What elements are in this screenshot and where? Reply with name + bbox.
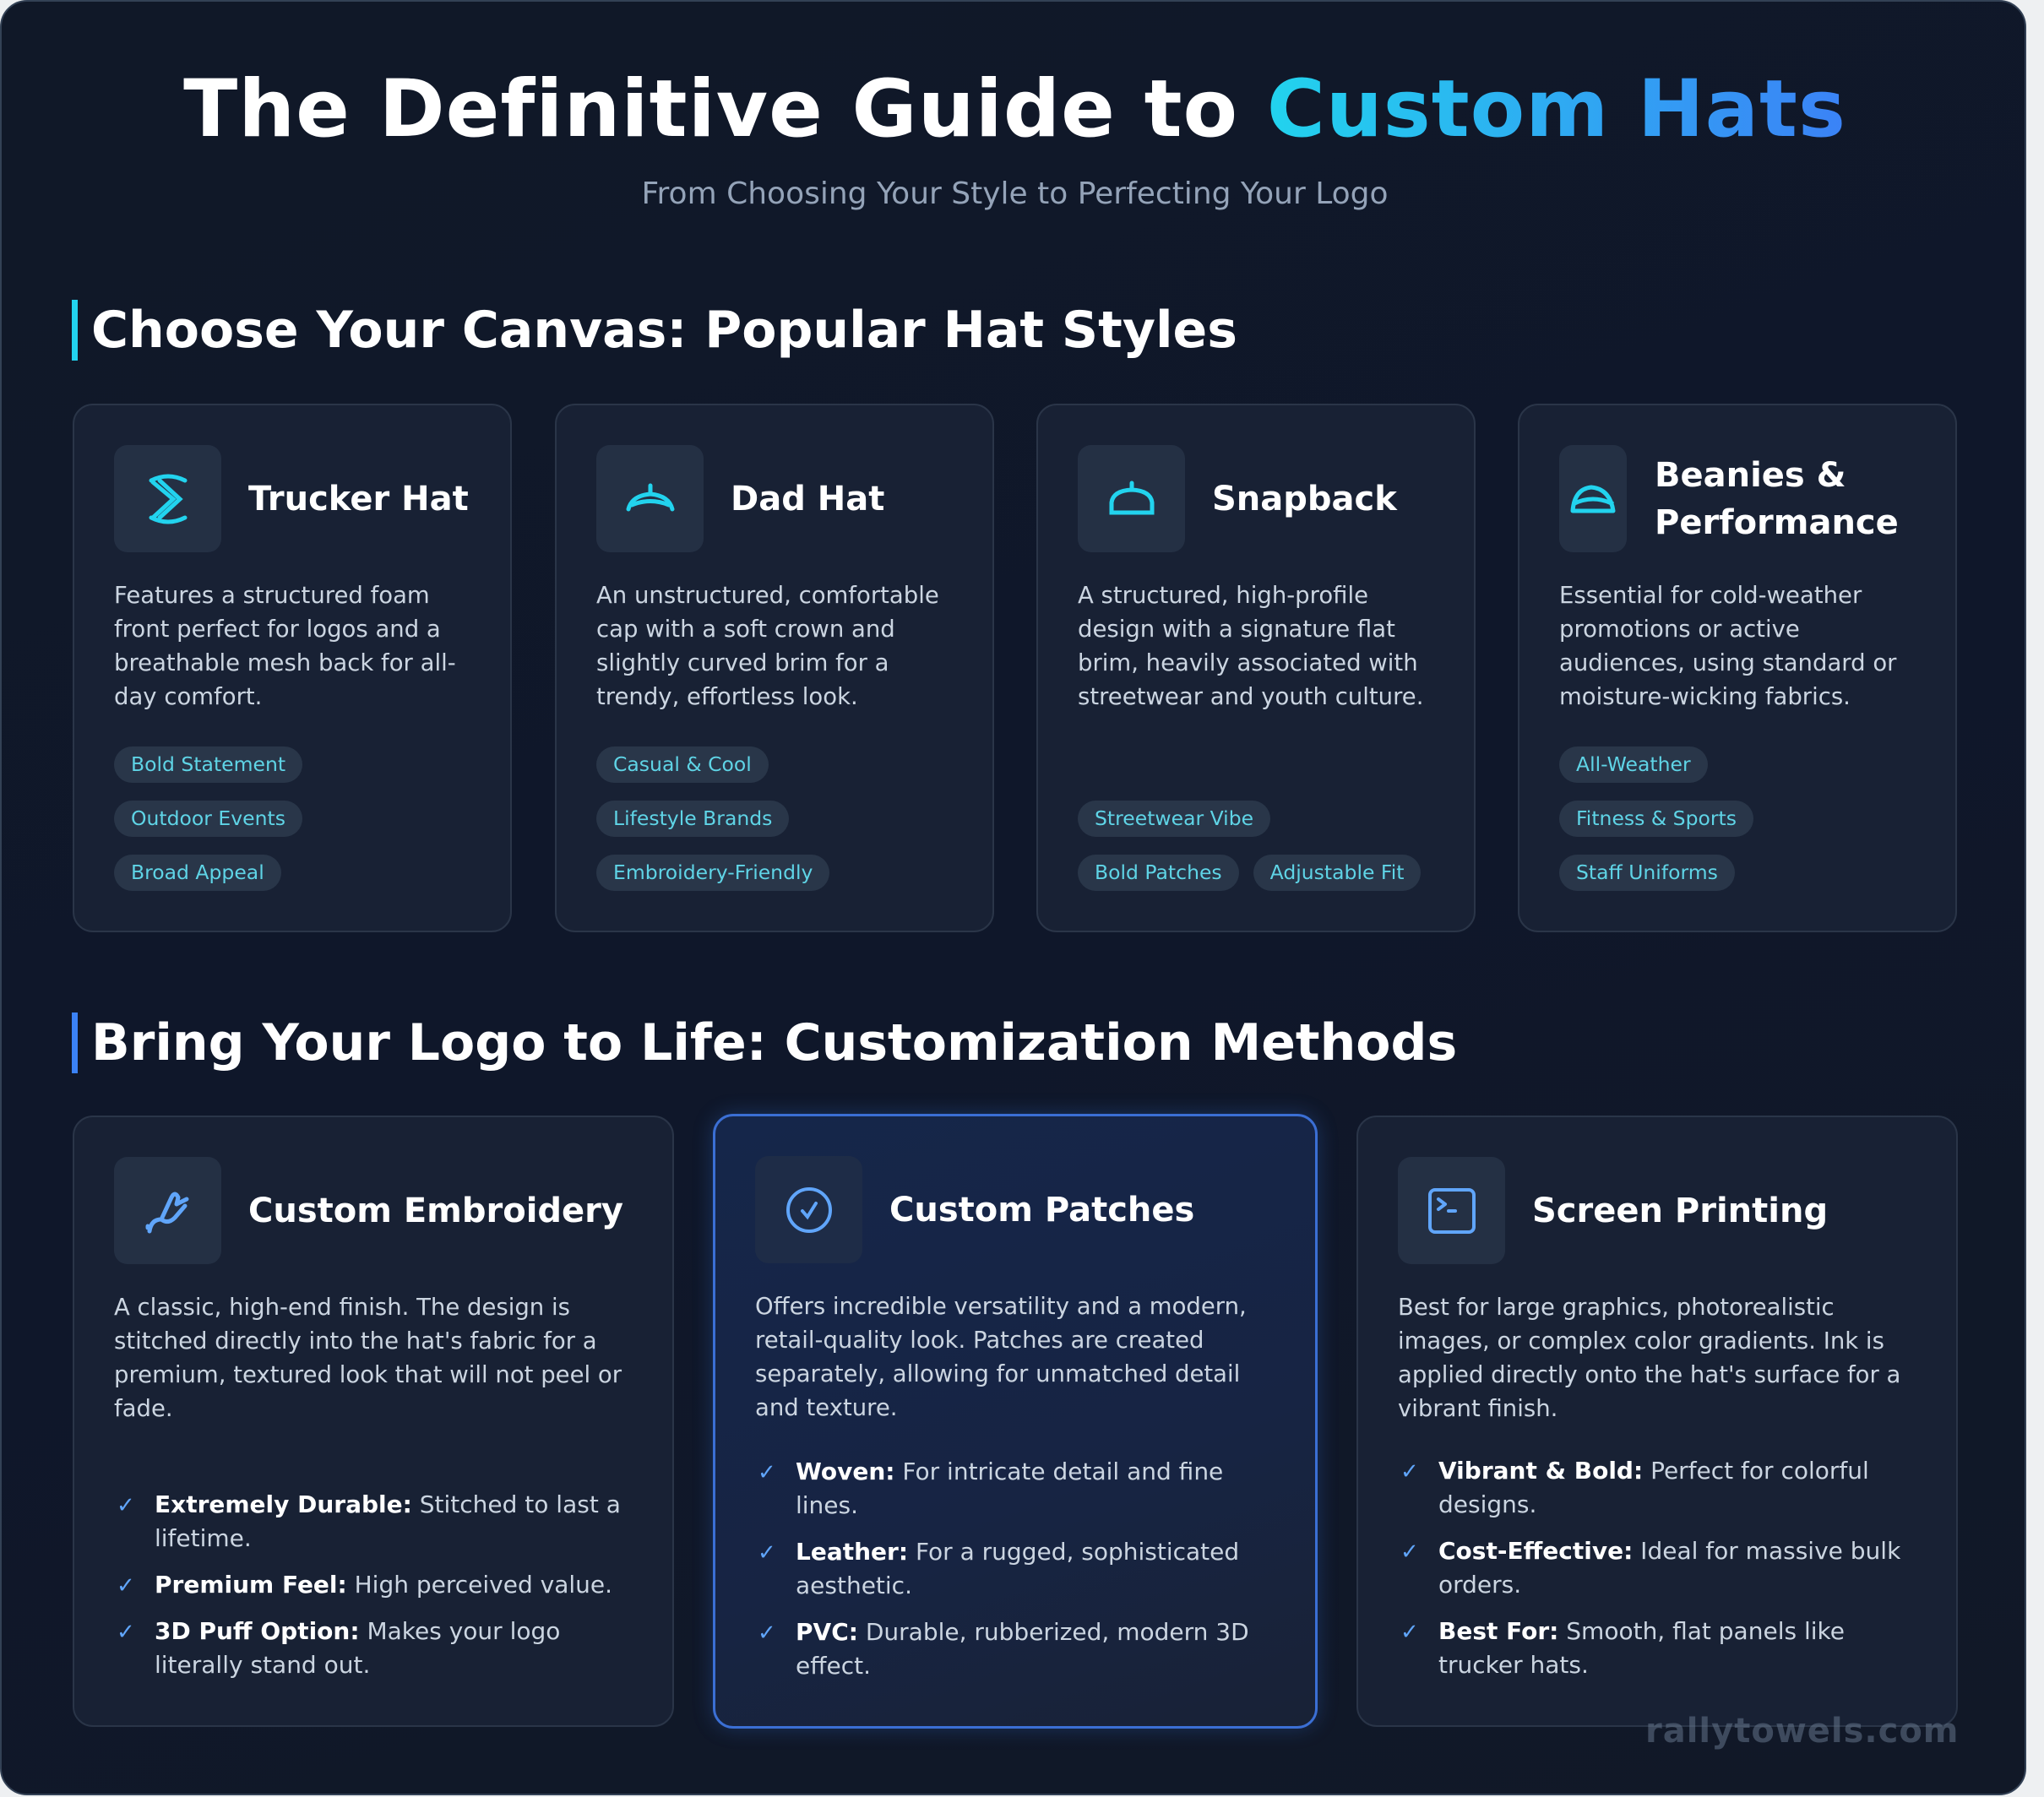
feature list: Best For: Smooth, flat panels like trucker hats. bbox=[1438, 1617, 1845, 1679]
tags: Adjustable Fit bbox=[1270, 860, 1404, 884]
feature list: Cost-Effective: Ideal for massive bulk orders. bbox=[1438, 1537, 1900, 1599]
header: beanies bbox=[1559, 445, 1899, 552]
icon: needle bbox=[114, 1157, 221, 1264]
header: trucker hat bbox=[114, 445, 469, 552]
title: The Definitive Guide to Custom Hats bbox=[183, 63, 1846, 155]
feature list bbox=[120, 1490, 621, 1679]
header: dad hat bbox=[596, 445, 884, 552]
tags: Casual & Cool bbox=[613, 752, 752, 776]
header: embroidery: Custom Embroidery bbox=[248, 1191, 623, 1230]
tags: Bold Patches bbox=[1095, 860, 1222, 884]
tags: Broad Appeal bbox=[131, 860, 264, 884]
tags bbox=[1559, 746, 1753, 891]
tags: Outdoor Events bbox=[131, 806, 285, 830]
header: snapback bbox=[1078, 445, 1398, 552]
icon: terminal bbox=[1398, 1157, 1505, 1264]
header: embroidery bbox=[114, 1157, 623, 1264]
feature list: PVC: Durable, rubberized, modern 3D effect. bbox=[796, 1618, 1249, 1680]
tags bbox=[1078, 801, 1421, 891]
tags: All-Weather bbox=[1576, 752, 1691, 776]
header: trucker hat: Trucker Hat bbox=[248, 480, 469, 518]
section heading: customization methods: Bring Your Logo to Life: Customization Methods bbox=[91, 1013, 1457, 1072]
tags: Streetwear Vibe bbox=[1095, 806, 1253, 830]
icon: snapback bbox=[1078, 445, 1185, 552]
description: An unstructured, comfortable cap with a soft crown and slightly curved brim for a trendy, effortless look. bbox=[596, 582, 939, 710]
panel: screen printing bbox=[1356, 1116, 1958, 1727]
tags: Lifestyle Brands bbox=[613, 806, 772, 830]
header: beanies: Performance bbox=[1655, 503, 1899, 542]
icon: dad hat bbox=[596, 445, 704, 552]
header: beanies: Beanies & bbox=[1655, 456, 1846, 495]
feature list: Vibrant & Bold: Perfect for colorful designs. bbox=[1438, 1457, 1869, 1518]
tags bbox=[114, 746, 302, 891]
description: A classic, high-end finish. The design is stitched directly into the hat's fabric for a premium, textured look that will not peel or fade. bbox=[114, 1294, 622, 1422]
feature list: Extremely Durable: Stitched to last a lifetime. bbox=[155, 1490, 621, 1552]
feature list: 3D Puff Option: Makes your logo literally stand out. bbox=[155, 1617, 560, 1679]
tags: Embroidery-Friendly bbox=[613, 860, 813, 884]
icon: beanie bbox=[1559, 445, 1627, 552]
panel: snapback bbox=[1036, 404, 1476, 932]
watermark: rallytowels.com bbox=[1645, 1712, 1959, 1751]
panel: custom patches (highlighted) bbox=[713, 1114, 1318, 1729]
description: Offers incredible versatility and a modern, retail-quality look. Patches are created separately, allowing for unmatched detail and texture. bbox=[755, 1293, 1247, 1421]
panel: trucker hat bbox=[73, 404, 512, 932]
header: patches: Custom Patches bbox=[889, 1191, 1194, 1230]
tags: Fitness & Sports bbox=[1576, 806, 1737, 830]
description: Features a structured foam front perfect for logos and a breathable mesh back for all-day comfort. bbox=[114, 582, 456, 710]
feature list: Premium Feel: High perceived value. bbox=[155, 1571, 612, 1599]
feature list bbox=[760, 1458, 1249, 1680]
header: patches bbox=[755, 1156, 1194, 1263]
panel: dad hat bbox=[555, 404, 994, 932]
header: dad hat: Dad Hat bbox=[731, 480, 884, 518]
feature list: Woven: For intricate detail and fine lines. bbox=[796, 1458, 1223, 1519]
description: Best for large graphics, photorealistic images, or complex color gradients. Ink is applied directly onto the hat's surface for a vibrant finish. bbox=[1398, 1294, 1900, 1422]
description: A structured, high-profile design with a signature flat brim, heavily associated with streetwear and youth culture. bbox=[1078, 582, 1423, 710]
tags: Bold Statement bbox=[131, 752, 285, 776]
panel: custom embroidery bbox=[73, 1116, 674, 1727]
feature list: Leather: For a rugged, sophisticated aesthetic. bbox=[796, 1538, 1239, 1599]
panel: beanies bbox=[1518, 404, 1957, 932]
section heading: hat styles: Choose Your Canvas: Popular Hat Styles bbox=[91, 301, 1237, 360]
tags: Staff Uniforms bbox=[1576, 860, 1718, 884]
header: screen printing bbox=[1398, 1157, 1828, 1264]
subtitle: From Choosing Your Style to Perfecting Your Logo bbox=[641, 176, 1389, 211]
header: screen printing: Screen Printing bbox=[1532, 1191, 1828, 1230]
feature list bbox=[1404, 1457, 1900, 1679]
tags bbox=[596, 746, 829, 891]
description: Essential for cold-weather promotions or active audiences, using standard or moisture-wicking fabrics. bbox=[1559, 582, 1896, 710]
icon: trucker hat bbox=[114, 445, 221, 552]
icon: check circle bbox=[755, 1156, 862, 1263]
header: snapback: Snapback bbox=[1212, 480, 1397, 518]
